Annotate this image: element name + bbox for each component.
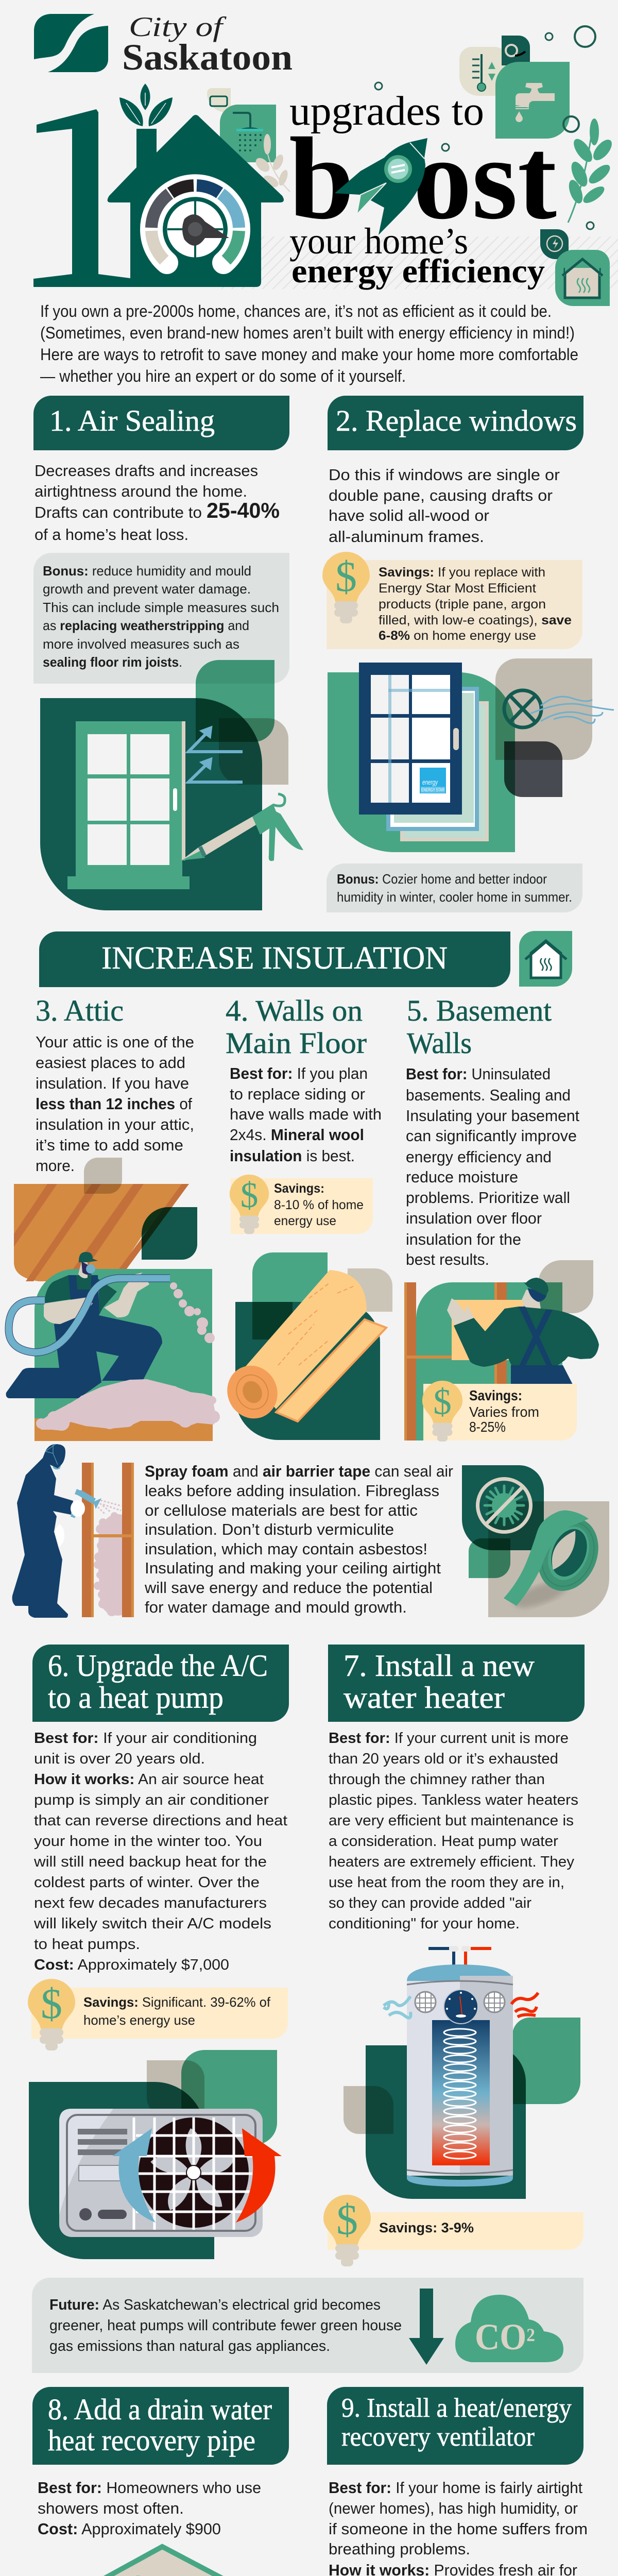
- callout: windows bonus: Bonus: Cozier home and better indoor: [337, 871, 547, 887]
- icon: savings bulb: $: [336, 2196, 358, 2244]
- heading: 8. drain water heat recovery: 8. Add a drain water: [48, 2393, 272, 2426]
- callout: windows savings: Energy Star Most Efficient: [379, 581, 536, 596]
- callout: basement savings: Savings:: [469, 1387, 522, 1403]
- text: basement walls: basements. Sealing and: [406, 1086, 571, 1104]
- text: basement walls: problems. Prioritize wall: [406, 1189, 570, 1207]
- icon: wind lines: [530, 697, 614, 723]
- text: attic: it’s time to add some: [36, 1136, 183, 1154]
- heading: 7. water heater: 7. Install a new: [344, 1649, 535, 1683]
- heading: 5. Basement walls: [407, 994, 552, 1060]
- text: air sealing intro: Drafts can contribute to: [35, 503, 202, 521]
- intro paragraph: (Sometimes, even brand-new homes aren’t built with energy efficiency in mind!): [40, 324, 575, 342]
- heading: 4. Walls on main floor: Main Floor: [226, 1026, 367, 1060]
- illustration: attic insulation blowing: [6, 1158, 220, 1441]
- text: heat pump: next few decades manufacturers: [34, 1895, 267, 1911]
- text: ventilator: (newer homes), has high humidity, or: [329, 2499, 578, 2517]
- callout: windows bonus: humidity in winter, cooler home in summer.: [337, 889, 572, 905]
- callout: basement savings: 8-25%: [469, 1419, 506, 1435]
- text: drain pipe: showers most often.: [38, 2499, 184, 2517]
- text: spray foam paragraph: insulation, which may contain asbestos!: [145, 1540, 427, 1558]
- callout: heat pump savings: Savings: Significant. 39-62% of: [83, 1994, 271, 2010]
- fan: [134, 2117, 252, 2230]
- worker: [6, 1252, 170, 1398]
- gauge and vents: [415, 1990, 505, 2024]
- text: air sealing intro: 25-40%: [207, 498, 280, 522]
- gauge dial: [151, 185, 239, 263]
- icon: energy star logo: energy: [422, 778, 438, 786]
- callout: windows savings: Savings: If you replace with: [379, 565, 545, 580]
- callout: air sealing bonus: growth and prevent water damage.: [43, 581, 251, 597]
- callout: air sealing bonus: sealing floor rim joists.: [43, 654, 182, 670]
- big number 1: [33, 109, 130, 287]
- text: spray foam paragraph: for water damage and mould growth.: [145, 1598, 407, 1616]
- heading: 6. heat pump: to a heat pump: [48, 1681, 224, 1715]
- callout: walls savings: energy use: [274, 1214, 336, 1228]
- heading: 5. Basement walls: Walls: [407, 1026, 472, 1060]
- title: energy efficiency: [291, 252, 545, 290]
- text: spray foam paragraph: Spray foam and air barrier tape can seal air: [145, 1462, 453, 1480]
- title: boost: [289, 114, 557, 244]
- icon: savings bulb: [322, 552, 370, 623]
- text: water heater: Best for: If your current unit is more: [329, 1730, 569, 1747]
- heading: 6. heat pump: [32, 1645, 289, 1722]
- callout: air sealing bonus: as replacing weatherstripping and: [43, 618, 249, 633]
- callout: air sealing bonus: more involved measures such as: [43, 636, 239, 652]
- text: spray foam paragraph: or cellulose materials are best for attic: [145, 1501, 418, 1519]
- text: water heater: are very efficient but maintenance is: [329, 1812, 574, 1829]
- text: attic: easiest places to add: [36, 1054, 185, 1072]
- text: water heater: use heat from the room they are in,: [329, 1874, 564, 1891]
- heading: 2. Replace windows: [328, 396, 583, 450]
- text: spray foam paragraph: will save energy and reduce the potential: [144, 1579, 433, 1597]
- text: basement walls: Insulating your basement: [406, 1107, 579, 1125]
- text: walls on main floor: insulation is best.: [230, 1147, 355, 1165]
- text: water heater: a consideration. Heat pump water: [329, 1833, 558, 1850]
- text: spray foam paragraph: insulation. Don’t disturb vermiculite: [145, 1520, 394, 1538]
- text: basement walls: insulation over floor: [406, 1209, 542, 1227]
- text: water heater: than 20 years old or it’s exhausted: [329, 1751, 558, 1767]
- city of Saskatoon logo: City of: [129, 11, 227, 42]
- heading: 9. heat recovery ventilator: 9. Install a heat/energy: [341, 2393, 572, 2423]
- title: your home’s: [289, 221, 468, 262]
- text: heat pump: will likely switch their A/C models: [33, 1916, 271, 1932]
- heading: 7. water heater: water heater: [344, 1681, 505, 1715]
- text: attic: Your attic is one of the: [36, 1033, 194, 1051]
- heading: 8. drain water heat recovery: heat recovery pipe: [48, 2424, 255, 2457]
- icon: CO2 cloud: 2: [526, 2325, 535, 2345]
- text: ventilator: [329, 2479, 588, 2576]
- intro paragraph: If you own a pre-2000s home, chances are, it’s not as efficient as it could be.: [40, 302, 552, 320]
- callout: air sealing bonus: This can include simple measures such: [43, 600, 279, 615]
- text: water heater: heaters are extremely efficient. They: [329, 1854, 575, 1870]
- text: air sealing intro: of a home’s heat loss.: [35, 526, 188, 544]
- text: ventilator: breathing problems.: [329, 2540, 470, 2558]
- icon: energy star logo: [420, 768, 446, 793]
- icon: savings bulb: $: [41, 1980, 62, 2028]
- text: air sealing intro: airtightness around the home.: [35, 482, 247, 500]
- text: attic: insulation. If you have: [36, 1074, 189, 1092]
- callout: windows savings: filled, with low-e coatings), save: [379, 613, 572, 628]
- icon: savings bulb: $: [241, 1176, 258, 1215]
- icon: CO2 cloud: CO: [475, 2316, 530, 2358]
- text: basement walls: insulation for the: [406, 1230, 521, 1248]
- icon: germ blocked: [478, 1479, 530, 1532]
- icon: savings bulb: $: [335, 553, 357, 601]
- green branch: [566, 118, 615, 223]
- callout: future: [32, 2278, 583, 2373]
- text: walls on main floor: [230, 1064, 382, 1165]
- illustration: heat pump unit: [29, 2050, 282, 2259]
- heading: 2. Replace windows: 2. Replace windows: [336, 404, 577, 437]
- text: attic: less than 12 inches of: [36, 1095, 192, 1113]
- decorative icon panels: thermometer, tape, faucet, energy, home: [459, 36, 610, 306]
- text: heat pump: your home in the winter too. You: [34, 1833, 262, 1850]
- foam: [36, 1282, 220, 1431]
- arrow: down: [409, 2289, 444, 2365]
- text: spray foam paragraph: Insulating and making your ceiling airtight: [145, 1559, 441, 1577]
- text: replace windows intro: [329, 466, 560, 546]
- icon: savings bulb: [230, 1175, 269, 1234]
- heading: increase insulation: INCREASE INSULATION: [101, 941, 448, 976]
- heading: 1. Air Sealing: [33, 396, 289, 450]
- text: replace windows intro: all-aluminum frames.: [329, 528, 484, 546]
- title: upgrades to: [289, 89, 484, 134]
- text: heat pump: coldest parts of winter. Over the: [34, 1874, 260, 1891]
- heading: 8. drain water heat recovery: [32, 2387, 289, 2465]
- hatched backdrop: [221, 236, 618, 289]
- text: basement walls: can significantly improve: [406, 1127, 577, 1145]
- text: walls on main floor: 2x4s. Mineral wool: [230, 1126, 364, 1144]
- text: replace windows intro: have solid all-wood or: [329, 506, 489, 524]
- callout: basement savings: Varies from: [469, 1404, 539, 1420]
- callout: heat pump savings: home’s energy use: [83, 2012, 195, 2028]
- callout: air sealing bonus: Bonus: reduce humidity and mould: [43, 563, 251, 579]
- panel: shower icon: [207, 88, 290, 192]
- icon: savings bulb: $: [433, 1382, 452, 1422]
- illustration: door and caulking: [40, 660, 303, 910]
- text: replace windows intro: Do this if windows are single or: [329, 466, 560, 484]
- arrows: air leaks: [188, 728, 243, 782]
- text: replace windows intro: double pane, causing drafts or: [329, 486, 553, 504]
- text: air sealing intro: [35, 462, 280, 544]
- text: heat pump: Cost: Approximately $7,000: [34, 1957, 229, 1973]
- text: heat pump: [33, 1730, 287, 1973]
- text: water heater: conditioning" for your home.: [329, 1916, 520, 1932]
- arrow: warm air: [236, 2128, 282, 2223]
- heading: 4. Walls on main floor: [226, 994, 367, 1060]
- text: heat pump: Best for: If your air conditioning: [34, 1730, 257, 1747]
- heading: 5. Basement walls: 5. Basement: [407, 994, 552, 1027]
- illustration: water heater: [344, 1946, 580, 2199]
- callout: water heater savings: [323, 2195, 583, 2266]
- wave icons: [384, 1993, 538, 2018]
- title: [289, 89, 557, 290]
- text: ventilator: if someone in the home suffers from: [329, 2520, 588, 2538]
- city of Saskatoon logo: Saskatoon: [122, 37, 293, 78]
- illustration: drain water heat recovery house: [11, 2547, 319, 2576]
- text: basement walls: reduce moisture: [406, 1168, 518, 1186]
- icon: CO2 cloud: [455, 2295, 563, 2362]
- text: water heater: through the chimney rather than: [329, 1771, 545, 1788]
- worker: [447, 1278, 599, 1384]
- illustration: spray foam worker: [12, 1444, 134, 1618]
- text: attic: insulation in your attic,: [36, 1115, 194, 1133]
- text: drain pipe: Best for: Homeowners who use: [38, 2479, 261, 2497]
- icon: spray gun: [71, 1489, 101, 1517]
- text: walls on main floor: to replace siding or: [230, 1085, 365, 1103]
- heading: 1. Air Sealing: 1. Air Sealing: [49, 404, 215, 437]
- intro paragraph: Here are ways to retrofit to save money and make your home more comfortable: [40, 345, 578, 364]
- text: basement walls: best results.: [406, 1250, 489, 1268]
- heading: 7. water heater: [328, 1645, 585, 1722]
- city of Saskatoon logo: [34, 11, 293, 78]
- text: heat pump: will still need backup heat for the: [33, 1854, 267, 1870]
- icon: no draft symbol: [504, 690, 541, 727]
- illustration: no-germ sign and tape: [462, 1465, 609, 1617]
- heading: 6. heat pump: 6. Upgrade the A/C: [48, 1649, 268, 1683]
- heading: 9. heat recovery ventilator: recovery ventilator: [341, 2422, 535, 2452]
- callout: windows savings: 6-8% on home energy use: [379, 629, 536, 643]
- illustration: mineral wool roll: [219, 1252, 392, 1440]
- heading: 3. Attic: 3. Attic: [36, 994, 124, 1027]
- foam in wall: [94, 1500, 122, 1616]
- callout: water heater savings: Savings: 3-9%: [379, 2220, 474, 2235]
- text: heat pump: unit is over 20 years old.: [34, 1751, 205, 1767]
- text: ventilator: Best for: If your home is fairly airtight: [329, 2479, 582, 2497]
- callout: windows savings: [322, 552, 582, 649]
- callout: future: greener, heat pumps will contribute fewer green house: [49, 2317, 402, 2334]
- text: water heater: so they can provide added "air: [329, 1895, 531, 1911]
- callout: heat pump savings: [28, 1979, 288, 2050]
- callout: walls savings: Savings:: [274, 1181, 324, 1196]
- callout: future: gas emissions than natural gas appliances.: [49, 2338, 330, 2354]
- text: walls on main floor: have walls made with: [230, 1105, 382, 1123]
- house with gauge: [108, 84, 284, 287]
- text: spray foam paragraph: leaks before adding insulation. Fibreglass: [145, 1482, 439, 1500]
- icon: savings bulb: [422, 1381, 462, 1442]
- leaves on chimney: [119, 84, 173, 126]
- callout: walls savings: [230, 1175, 373, 1234]
- callout: future: Future: As Saskatchewan’s electrical grid becomes: [49, 2297, 381, 2313]
- callout: walls savings: 8-10 % of home: [274, 1198, 364, 1212]
- icon: savings bulb: [323, 2195, 371, 2266]
- text: water heater: [329, 1730, 578, 1932]
- text: heat pump: How it works: An air source heat: [34, 1771, 264, 1788]
- text: drain pipe: Cost: Approximately $900: [38, 2520, 221, 2538]
- heading: 9. heat recovery ventilator: [327, 2387, 583, 2465]
- door: [67, 721, 190, 889]
- text: water heater: plastic pipes. Tankless water heaters: [329, 1792, 578, 1808]
- text: basement walls: [406, 1065, 579, 1268]
- icon: air barrier tape: [504, 1509, 609, 1613]
- callout: windows savings: products (triple pane, argon: [379, 597, 546, 612]
- text: attic: more.: [36, 1157, 75, 1175]
- text: drain pipe: [38, 2479, 261, 2538]
- text: basement walls: energy efficiency and: [406, 1148, 552, 1166]
- text: walls on main floor: Best for: If you plan: [230, 1064, 368, 1082]
- icon: energy star logo: ENERGY STAR: [421, 787, 444, 792]
- illustration: basement wall insulation: [404, 1260, 599, 1440]
- decorative bubbles: [375, 26, 595, 229]
- intro paragraph: [40, 302, 578, 385]
- text: heat pump: pump is simply an air conditioner: [34, 1792, 269, 1808]
- callout: basement savings: [422, 1381, 577, 1442]
- text: attic: [36, 1033, 194, 1175]
- text: heat pump: to heat pumps.: [34, 1936, 140, 1953]
- text: air sealing intro: Decreases drafts and increases: [35, 462, 258, 480]
- text: basement walls: Best for: Uninsulated: [406, 1065, 551, 1083]
- arrow: cool air: [112, 2128, 156, 2223]
- heading: 4. Walls on main floor: 4. Walls on: [226, 994, 363, 1027]
- illustration: window: [328, 658, 614, 852]
- callout: air sealing bonus: [33, 553, 289, 684]
- icon: caulking gun: [181, 794, 303, 861]
- icon: rocket: [335, 138, 427, 235]
- water column: [432, 2020, 490, 2165]
- intro paragraph: — whether you hire an expert or do some of it yourself.: [40, 367, 406, 385]
- heading: increase insulation: [39, 931, 510, 987]
- text: spray foam paragraph: [144, 1462, 453, 1616]
- icon: savings bulb: [28, 1979, 75, 2050]
- text: heat pump: that can reverse directions and heat: [34, 1812, 287, 1829]
- callout: windows bonus: [327, 863, 582, 912]
- icon: home heat: [519, 931, 572, 987]
